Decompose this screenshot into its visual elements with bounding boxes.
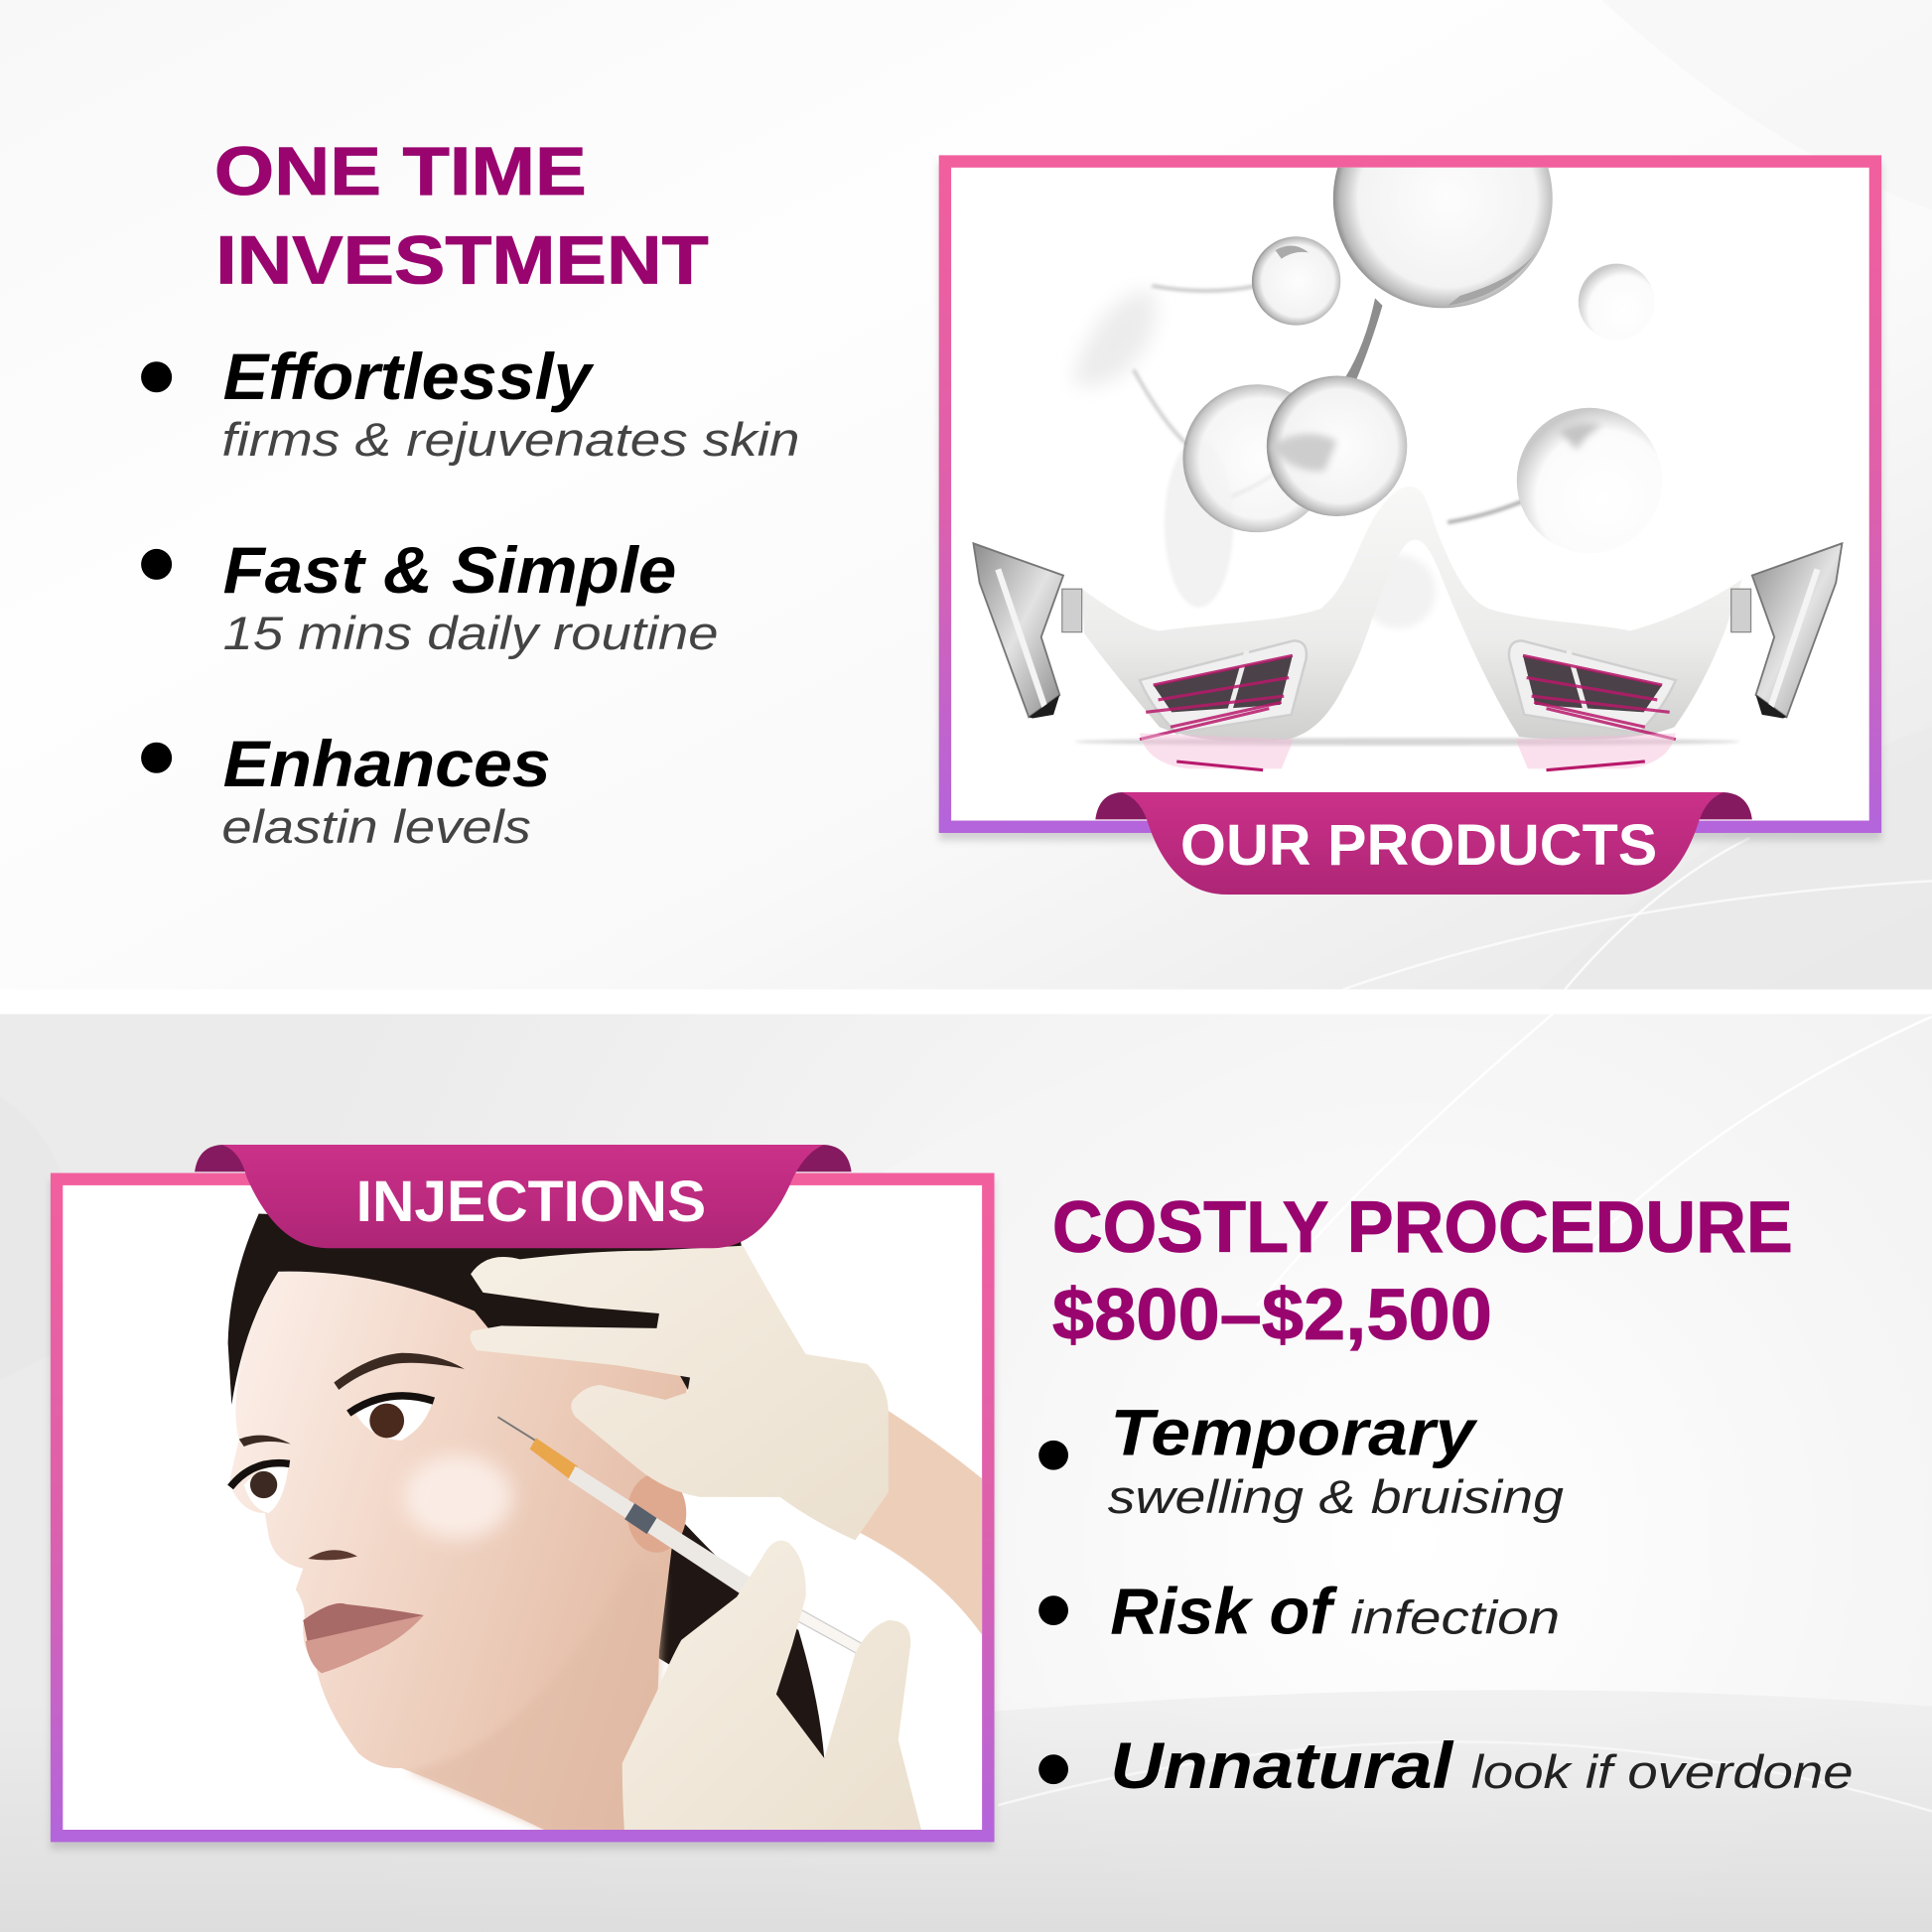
device body: [1082, 486, 1742, 742]
face and neck: [229, 1257, 690, 1836]
benefit: effortlessly: Effortlessly: [223, 340, 595, 413]
brows and eyes: [230, 1353, 465, 1513]
neck shadow: [407, 1559, 665, 1836]
list: injection drawbacks: [1038, 1396, 1854, 1802]
list: product benefits: [141, 340, 799, 853]
drawback: unnatural look: look if overdone: [1471, 1745, 1854, 1798]
photo: woman receiving injection: [228, 1213, 982, 1836]
nostril: [308, 1550, 357, 1560]
heading: one time investment: INVESTMENT: [215, 222, 709, 298]
drawback: risk of infection: [1038, 1575, 1560, 1648]
heading: costly procedure: $800–$2,500: [1052, 1274, 1492, 1355]
drawback: temporary: Temporary: [1110, 1396, 1478, 1469]
drawback: unnatural look: [1038, 1728, 1854, 1802]
illustration: molecules: [1076, 167, 1656, 627]
left LED panel: [1140, 640, 1307, 770]
benefit: effortlessly: firms & rejuvenates skin: [221, 413, 799, 466]
panel: our products photo frame: [939, 88, 1881, 840]
benefit: enhances: Enhances: [223, 727, 551, 800]
pale blurred molecule: [1072, 290, 1156, 386]
benefit: fast and simple: [141, 533, 719, 659]
drawback: temporary: [1038, 1396, 1564, 1523]
panel: bottom background: [0, 1014, 1932, 1932]
cheek highlight: [404, 1455, 512, 1539]
banner: our products: OUR PRODUCTS: [1180, 813, 1657, 878]
lower glove: [622, 1541, 923, 1836]
heading: one time investment: [214, 134, 709, 298]
left lens arm: [973, 543, 1082, 719]
banner: our products: [1095, 792, 1752, 895]
illustration: LED eye device: [973, 486, 1842, 770]
panel: top background: [728, 148, 1932, 989]
arm: [855, 1411, 982, 1635]
benefit: enhances: [141, 727, 551, 853]
benefit: effortlessly: [141, 340, 799, 466]
benefit: enhances: elastin levels: [221, 800, 531, 853]
heading: one time investment: ONE TIME: [214, 134, 587, 209]
benefit: fast and simple: 15 mins daily routine: [223, 607, 719, 659]
hair: [228, 1213, 763, 1405]
ear: [627, 1473, 686, 1553]
drawback: temporary: swelling & bruising: [1108, 1470, 1564, 1523]
right LED panel: [1509, 640, 1676, 770]
banner: injections: [195, 1145, 852, 1248]
syringe: [497, 1417, 869, 1657]
heading: costly procedure: [1052, 1186, 1793, 1355]
ponytail: [659, 1524, 824, 1758]
drawback: risk of infection: Risk of: [1110, 1575, 1338, 1648]
banner: injections: INJECTIONS: [356, 1170, 706, 1234]
benefit: fast and simple: Fast & Simple: [223, 533, 676, 607]
drawback: risk of infection: infection: [1350, 1591, 1560, 1644]
floor shadow: [1074, 738, 1739, 746]
drawback: unnatural look: Unnatural: [1110, 1728, 1454, 1802]
lips: [303, 1603, 424, 1673]
heading: costly procedure: COSTLY PROCEDURE: [1052, 1186, 1793, 1268]
upper glove: [471, 1246, 889, 1540]
right lens arm: [1731, 543, 1842, 719]
panel: injections photo frame: [51, 1173, 995, 1850]
